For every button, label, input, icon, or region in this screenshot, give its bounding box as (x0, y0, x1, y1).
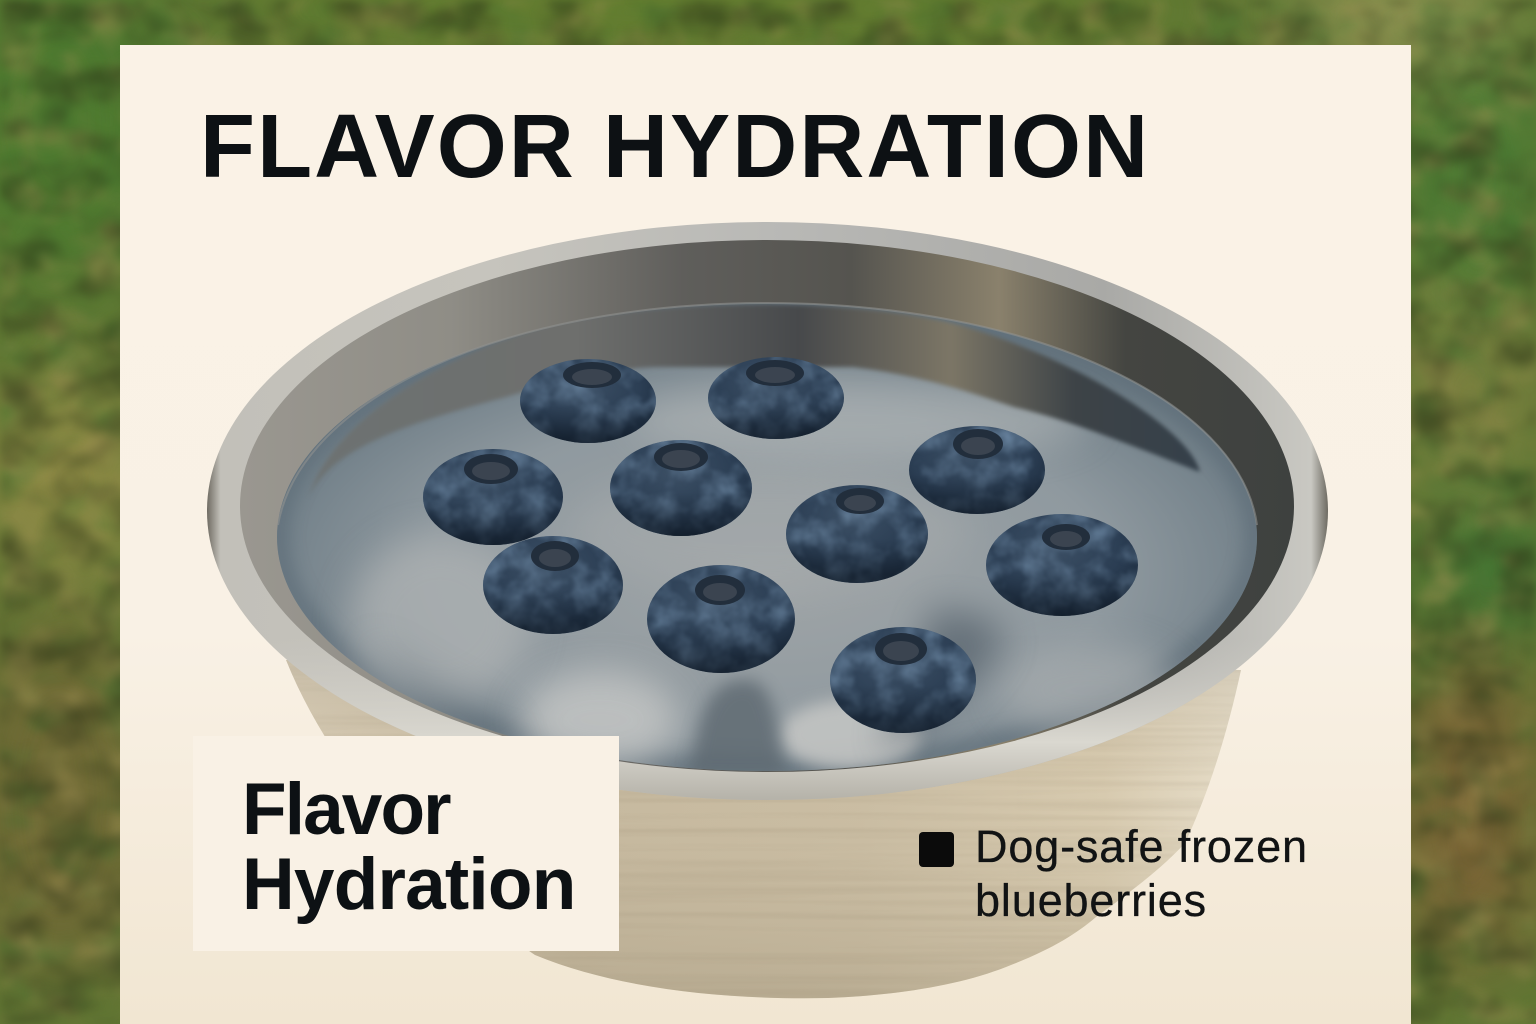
blueberry 9 (647, 565, 795, 673)
label card: Flavor (242, 769, 450, 850)
label card (193, 736, 619, 951)
water ledge highlight (278, 303, 1257, 525)
blueberry 1 (520, 359, 656, 443)
blueberry 7 (986, 514, 1138, 616)
water surface (277, 303, 1257, 771)
bowl rim (207, 222, 1328, 800)
label card: Hydration (242, 844, 576, 925)
bowl inner wall (240, 240, 1294, 772)
ingredient text: Dog-safe frozen (975, 821, 1308, 872)
blueberry 2 (708, 357, 844, 439)
blueberry 6 (786, 485, 928, 583)
water reflections (278, 304, 1256, 775)
bowl outer body (280, 650, 1250, 1010)
blueberry 8 (483, 536, 623, 634)
ingredient note (919, 821, 1308, 926)
blueberry 10 (830, 627, 976, 733)
title: FLAVOR HYDRATION (200, 97, 1150, 197)
blueberry 5 (909, 426, 1045, 514)
ingredient text (975, 821, 1308, 926)
blueberry 4 (610, 440, 752, 536)
icon: black square bullet (919, 832, 954, 867)
illustration: steel bowl with blueberries (207, 222, 1328, 1010)
blueberries (423, 357, 1138, 733)
ingredient text: blueberries (975, 875, 1207, 926)
reflection of bowl wall (309, 304, 1200, 497)
blueberry 3 (423, 449, 563, 545)
